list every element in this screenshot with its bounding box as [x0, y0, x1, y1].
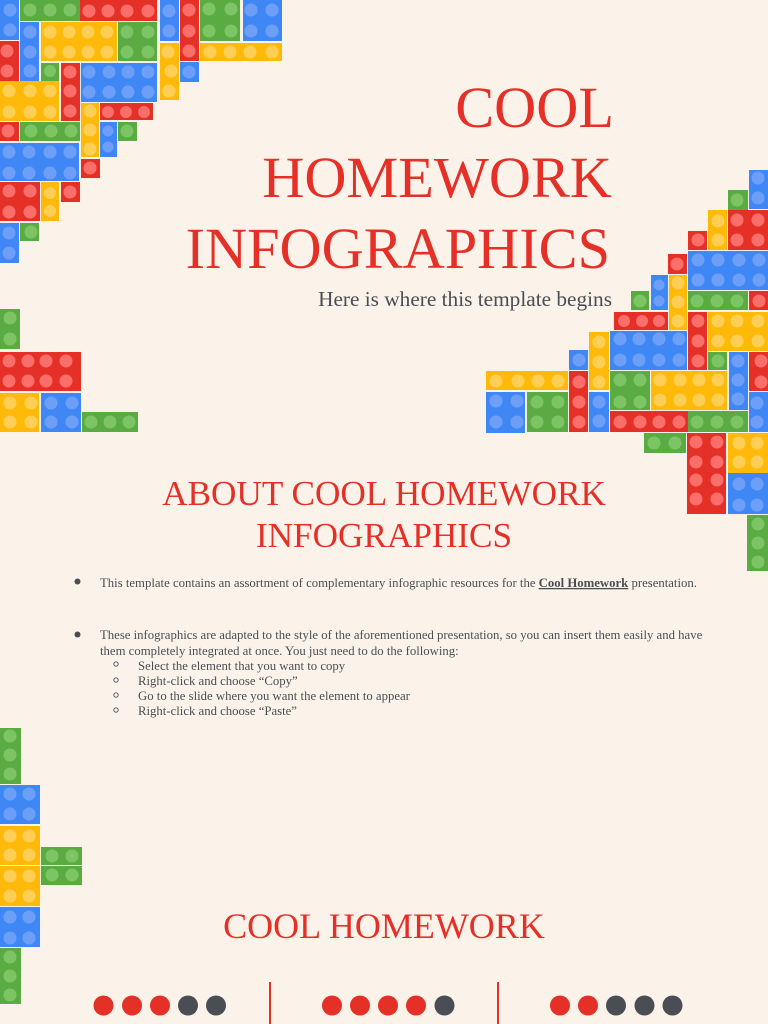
rating dots: first group: [94, 996, 226, 1016]
rating dots: second group: [322, 996, 454, 1016]
rating dots: third group: [550, 996, 682, 1016]
section heading: cool homework: COOL HOMEWORK: [223, 906, 545, 946]
section heading: about: [162, 474, 606, 555]
sub-list: copy and paste steps: Right-click and choose “Copy”: [138, 674, 298, 688]
title: HOMEWORK: [262, 145, 612, 210]
bricks: left middle cluster: [0, 309, 138, 432]
bricks: right cluster: [486, 170, 768, 571]
bricks: bottom-left cluster: [0, 728, 82, 1004]
sub-list: copy and paste steps: Go to the slide where you want the element to appear: [138, 689, 411, 703]
divider line: [497, 982, 499, 1024]
section heading: about: ABOUT COOL HOMEWORK: [162, 474, 606, 513]
title: COOL: [455, 75, 614, 140]
sub-list: copy and paste steps: [114, 659, 411, 718]
subtitle: Here is where this template begins: [318, 287, 612, 311]
title: INFOGRAPHICS: [186, 216, 610, 281]
bullet list: [74, 576, 703, 718]
sub-list: copy and paste steps: Select the element that you want to copy: [138, 659, 346, 673]
title: [186, 75, 614, 281]
bricks: top-left cluster: [0, 0, 282, 263]
bullet: usage instructions: them completely integrated at once. You just need to do the following:: [100, 644, 459, 658]
section heading: about: INFOGRAPHICS: [256, 516, 512, 555]
bullet: template description: This template contains an assortment of complementary infographic resources for the Cool Homework presentation.: [100, 576, 697, 590]
divider line: [269, 982, 271, 1024]
bullet: usage instructions: These infographics are adapted to the style of the aforementioned presentation, so you can insert them easily and have: [100, 628, 703, 642]
bullet: usage instructions: [74, 628, 703, 658]
sub-list: copy and paste steps: Right-click and choose “Paste”: [138, 704, 297, 718]
